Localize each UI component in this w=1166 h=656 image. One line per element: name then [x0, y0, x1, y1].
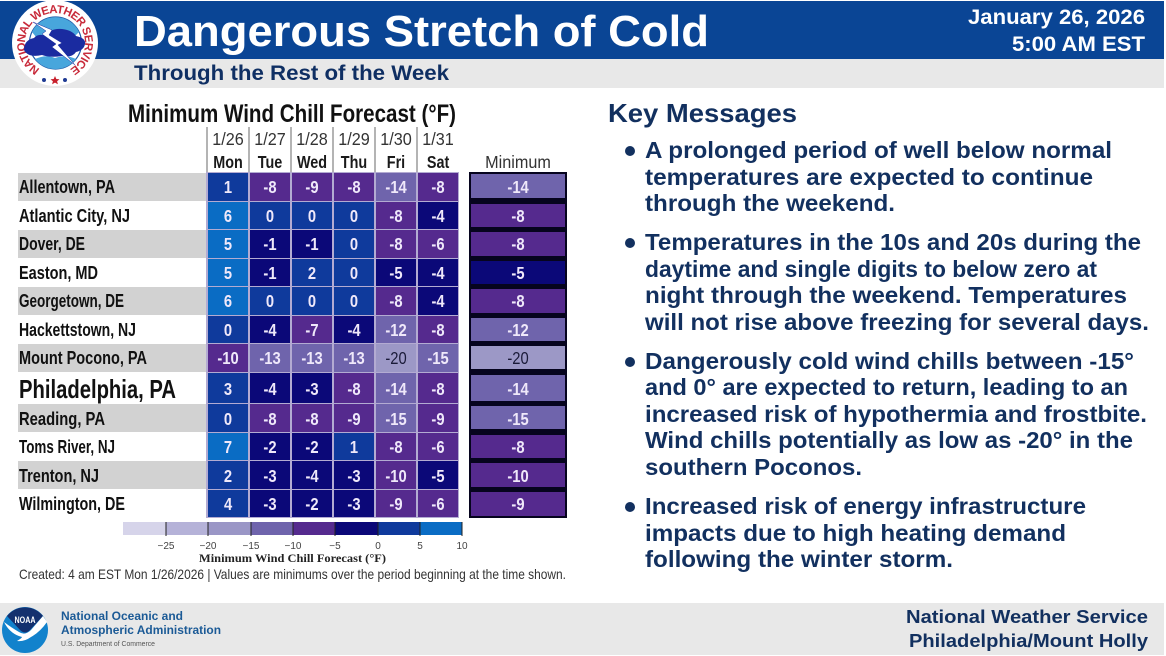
key message 4: impacts due to high heating demand: [645, 520, 1066, 546]
row: Hackettstown: [19, 316, 565, 343]
row: Georgetown: 6: [224, 292, 232, 311]
row: Easton: -5: [389, 264, 403, 283]
row: Reading: -8: [305, 410, 319, 429]
row: Dover: -8: [511, 235, 525, 254]
row: Wilmington: Wilmington, DE: [19, 494, 125, 514]
chart heading: Minimum Wind Chill Forecast (°F): [128, 100, 456, 128]
row: Toms River: [19, 433, 565, 460]
row: Dover: -1: [305, 235, 319, 254]
row: Allentown: Allentown, PA: [19, 177, 115, 197]
row: Wilmington: -9: [511, 495, 525, 514]
key message 3: southern Poconos.: [645, 454, 862, 480]
key messages heading: Key Messages: [608, 98, 797, 128]
row: Wilmington: -3: [347, 495, 361, 514]
row: Mount Pocono: -15: [427, 349, 449, 368]
row: Trenton: -10: [507, 467, 529, 486]
row: Trenton: Trenton, NJ: [19, 466, 99, 486]
row: Easton: -5: [511, 264, 525, 283]
table: date headers: Wed: [297, 153, 327, 172]
row: Allentown: -8: [263, 178, 277, 197]
key message 1: temperatures are expected to continue: [645, 164, 1093, 190]
row: Easton: -4: [432, 264, 445, 283]
row: Mount Pocono: -13: [259, 349, 281, 368]
row: Reading: -9: [431, 410, 445, 429]
row: Reading: -15: [385, 410, 407, 429]
legend: color bar: 5: [417, 541, 423, 552]
row: Toms River: 7: [224, 438, 232, 457]
row: Toms River: -8: [511, 438, 525, 457]
row: Wilmington: -9: [389, 495, 403, 514]
chart footnote: Created: 4 am EST Mon 1/26/2026 | Values are minimums over the period beginning at the time shown.: [19, 566, 566, 582]
row: Easton: 5: [224, 264, 232, 283]
row: Allentown: -14: [385, 178, 408, 197]
row: Hackettstown: -4: [264, 321, 277, 340]
NOAA agency name: Atmospheric Administration: [61, 625, 221, 637]
issue date and time: 5:00 AM EST: [1012, 33, 1145, 56]
key message 1: [625, 137, 1112, 216]
legend: color bar: 0: [375, 541, 381, 552]
key message 3: increased risk of hypothermia and frostbite.: [645, 401, 1147, 427]
row: Philadelphia: [19, 373, 565, 404]
icon: NOAA logo: NOAA: [14, 615, 36, 625]
row: Hackettstown: -12: [507, 321, 529, 340]
key message 3: Dangerously cold wind chills between -15°: [645, 348, 1134, 374]
table: date headers: Sat: [427, 153, 450, 172]
row: Dover: -8: [389, 235, 403, 254]
row: Georgetown: 0: [308, 292, 316, 311]
table: date headers: 1/26: [212, 129, 244, 149]
row: Toms River: -2: [263, 438, 277, 457]
key message 2: night through the weekend. Temperatures: [645, 282, 1127, 308]
row: Reading: -9: [347, 410, 361, 429]
issue date and time: January 26, 2026: [968, 6, 1145, 29]
row: Hackettstown: -4: [348, 321, 361, 340]
table: date headers: Mon: [213, 153, 243, 172]
key message 2: will not rise above freezing for several days.: [644, 309, 1149, 335]
key message 3: Wind chills potentially as low as -20° in the: [645, 427, 1133, 453]
key message 4: Increased risk of energy infrastructure: [645, 493, 1086, 519]
row: Allentown: [19, 173, 565, 201]
row: Atlantic City: [19, 202, 565, 229]
row: Wilmington: -3: [263, 495, 277, 514]
row: Easton: [19, 259, 565, 286]
row: Easton: 0: [350, 264, 358, 283]
row: Georgetown: -8: [511, 292, 525, 311]
row: Trenton: -3: [263, 467, 277, 486]
row: Mount Pocono: -20: [507, 349, 529, 368]
table: date headers: 1/31: [422, 129, 454, 149]
NOAA agency name: U.S. Department of Commerce: [61, 641, 155, 648]
row: Philadelphia: -8: [431, 380, 445, 399]
row: Wilmington: 4: [224, 495, 233, 514]
row: Allentown: 1: [224, 178, 232, 197]
row: Dover: -1: [263, 235, 277, 254]
row: Allentown: -9: [305, 178, 319, 197]
row: Philadelphia: -14: [507, 380, 530, 399]
row: Reading: [19, 404, 565, 432]
row: Hackettstown: 0: [224, 321, 232, 340]
row: Hackettstown: Hackettstown, NJ: [19, 320, 136, 340]
row: Dover: -6: [431, 235, 445, 254]
row: Reading: -8: [263, 410, 277, 429]
key message 3: [625, 348, 1147, 480]
header banner: [0, 1, 1164, 88]
row: Philadelphia: -8: [347, 380, 361, 399]
row: Dover: Dover, DE: [19, 234, 85, 254]
footer band: [0, 603, 1164, 655]
row: Dover: 5: [224, 235, 232, 254]
table: city row stripes and grid backing: [18, 172, 459, 518]
key message 2: [625, 229, 1149, 335]
legend: color bar: −5: [329, 541, 341, 552]
row: Mount Pocono: [19, 344, 565, 372]
row: Philadelphia: -4: [264, 380, 277, 399]
NWS office name: Philadelphia/Mount Holly: [909, 630, 1149, 651]
row: Toms River: 1: [350, 438, 358, 457]
row: Dover: [19, 230, 565, 258]
row: Hackettstown: -12: [385, 321, 407, 340]
legend: color bar: −25: [158, 541, 175, 552]
row: Trenton: -3: [347, 467, 361, 486]
row: Mount Pocono: -13: [343, 349, 365, 368]
key message 4: following the winter storm.: [645, 546, 953, 572]
row: Trenton: 2: [224, 467, 232, 486]
minimum column frame: [469, 172, 567, 518]
row: Allentown: -14: [507, 178, 530, 197]
row: Philadelphia: Philadelphia, PA: [19, 374, 176, 404]
row: Atlantic City: 6: [224, 207, 232, 226]
row: Wilmington: -2: [305, 495, 319, 514]
table: date headers: Fri: [387, 153, 405, 172]
row: Philadelphia: -14: [385, 380, 408, 399]
legend: color bar: −10: [285, 541, 302, 552]
row: Georgetown: 0: [350, 292, 358, 311]
key message 1: through the weekend.: [645, 190, 895, 216]
row: Wilmington: [19, 490, 565, 517]
row: Easton: Easton, MD: [19, 263, 98, 283]
legend: color bar: −15: [243, 541, 260, 552]
subtitle: Through the Rest of the Week: [134, 62, 449, 85]
row: Philadelphia: -3: [305, 380, 319, 399]
row: Trenton: -4: [306, 467, 319, 486]
row: Toms River: -8: [389, 438, 403, 457]
row: Atlantic City: 0: [308, 207, 316, 226]
row: Mount Pocono: -13: [301, 349, 323, 368]
legend title: Minimum Wind Chill Forecast (°F): [199, 551, 386, 565]
row: Trenton: -10: [385, 467, 407, 486]
table: date headers: 1/29: [338, 129, 370, 149]
legend: color bar: 10: [456, 541, 468, 552]
NOAA agency name: National Oceanic and: [61, 611, 183, 623]
row: Allentown: -8: [431, 178, 445, 197]
row: Georgetown: -4: [432, 292, 445, 311]
row: Easton: 2: [308, 264, 316, 283]
row: Toms River: -2: [305, 438, 319, 457]
row: Atlantic City: 0: [350, 207, 358, 226]
table: date headers: Tue: [258, 153, 282, 172]
key message 4: [625, 493, 1086, 572]
row: Toms River: -6: [431, 438, 445, 457]
legend: color bar: [123, 522, 468, 552]
NOAA agency name: [61, 611, 221, 648]
row: Allentown: -8: [347, 178, 361, 197]
row: Georgetown: Georgetown, DE: [19, 291, 124, 311]
row: Reading: Reading, PA: [19, 409, 105, 429]
row: Toms River: Toms River, NJ: [19, 437, 115, 457]
row: Atlantic City: -8: [511, 207, 525, 226]
row: Reading: -15: [507, 410, 529, 429]
table: date headers: Thu: [341, 153, 367, 172]
row: Mount Pocono: -10: [217, 349, 239, 368]
legend: color bar: −20: [200, 541, 217, 552]
table: date headers: [207, 127, 551, 172]
row: Atlantic City: -8: [389, 207, 403, 226]
row: Wilmington: -6: [431, 495, 445, 514]
NWS office name: [906, 606, 1149, 651]
row: Trenton: [19, 461, 565, 489]
row: Philadelphia: 3: [224, 380, 232, 399]
row: Mount Pocono: Mount Pocono, PA: [19, 348, 147, 368]
row: Hackettstown: -7: [305, 321, 319, 340]
key message 3: and 0° are expected to return, leading to an: [645, 374, 1128, 400]
table: date headers: 1/27: [254, 129, 286, 149]
row: Atlantic City: -4: [432, 207, 445, 226]
row: Hackettstown: -8: [431, 321, 445, 340]
issue date and time: [968, 6, 1145, 56]
key message 2: Temperatures in the 10s and 20s during the: [645, 229, 1141, 255]
NWS office name: National Weather Service: [906, 606, 1148, 627]
icon: National Weather Service logo: NATIONAL WEATHER SERVICE: [17, 5, 93, 76]
row: Georgetown: 0: [266, 292, 274, 311]
row: Atlantic City: 0: [266, 207, 274, 226]
row: Easton: -1: [263, 264, 277, 283]
row: Mount Pocono: -20: [385, 349, 407, 368]
row: Atlantic City: Atlantic City, NJ: [19, 206, 130, 226]
icon: NOAA logo: [2, 607, 48, 653]
row: Trenton: -5: [431, 467, 445, 486]
key message 2: daytime and single digits to below zero at: [645, 256, 1097, 282]
table: date headers: 1/28: [296, 129, 328, 149]
row: Georgetown: [19, 287, 565, 315]
row: Georgetown: -8: [389, 292, 403, 311]
title: Dangerous Stretch of Cold: [134, 7, 709, 56]
row: Dover: 0: [350, 235, 358, 254]
table: date headers: 1/30: [380, 129, 412, 149]
row: Reading: 0: [224, 410, 232, 429]
table: date headers: Minimum: [485, 152, 551, 172]
key message 1: A prolonged period of well below normal: [645, 137, 1112, 163]
